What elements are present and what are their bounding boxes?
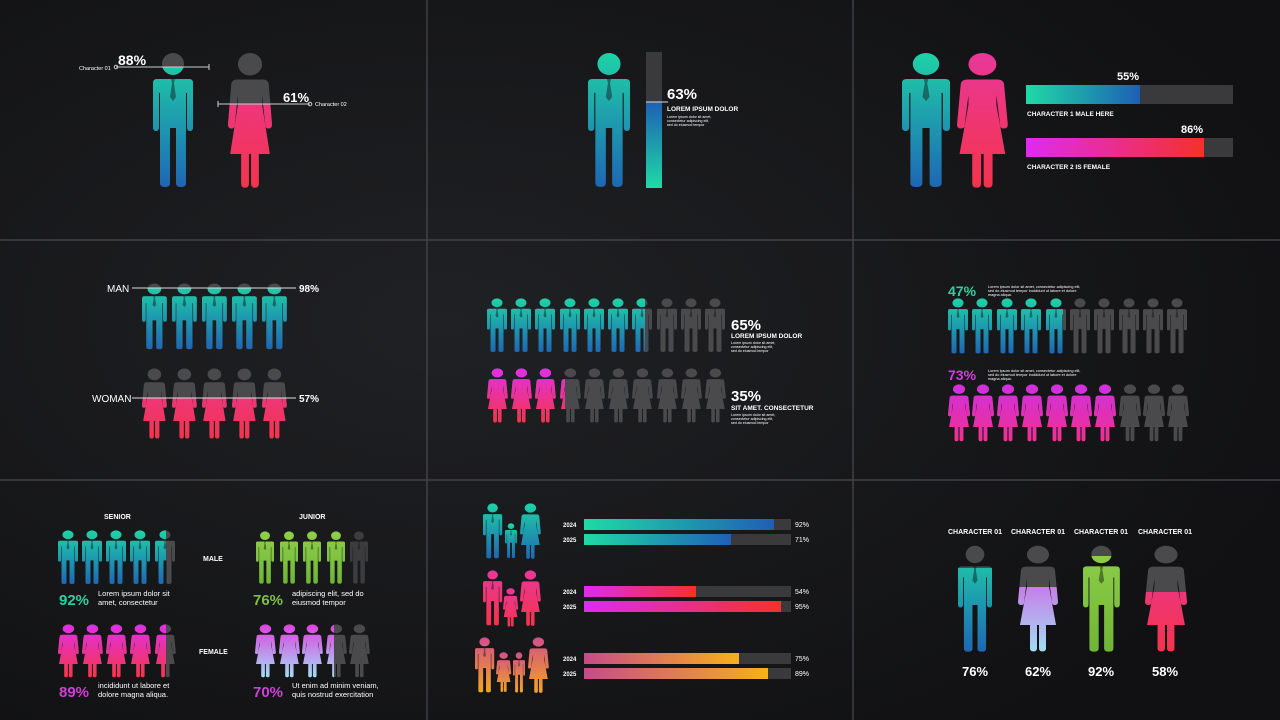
text: 70%: 70% [253, 684, 283, 701]
text: 63% lorem ipsum: Lorem ipsum dolor sit amet, [667, 115, 711, 119]
icon: family 2 [483, 570, 541, 627]
character 3: man 92%: 92% [1088, 664, 1114, 679]
icon: woman 61% [228, 53, 272, 188]
text: 89%: 89% [59, 684, 89, 701]
text: 89%: incididunt ut labore et [98, 681, 170, 690]
row: senior men 92% [58, 530, 175, 584]
panel: man with vertical bar [588, 52, 738, 188]
panel: characters with horizontal bars [902, 53, 1233, 188]
text: 35%: SIT AMET. CONSECTETUR [731, 405, 814, 412]
character 1: man 76% [948, 529, 1002, 679]
row: man 98% [107, 283, 319, 349]
text: 35%: sed do eiusmod tempor [731, 421, 769, 425]
text: 65% [731, 317, 802, 353]
text: 65%: 65% [731, 317, 761, 334]
icon: family 1 [483, 503, 541, 559]
text: 47%: magna aliqua. [988, 293, 1012, 297]
bars: family 3: 75% [795, 656, 809, 663]
row: junior women 70% [255, 624, 370, 677]
character 2: woman 62%: 62% [1025, 664, 1051, 679]
label: character 02 [218, 90, 347, 108]
text: 76% [253, 589, 364, 609]
panel: four characters [948, 529, 1192, 679]
text: 92%: amet, consectetur [98, 598, 158, 607]
row: junior men 76% [256, 531, 368, 584]
row: women 73% [948, 384, 1189, 441]
character 3: man 92% [1074, 529, 1128, 679]
character 4: woman 58%: 58% [1152, 664, 1178, 679]
panel: man and woman rows [92, 283, 319, 438]
row: women 35% [487, 368, 726, 423]
text: 76%: 76% [253, 592, 283, 609]
label: male: MALE [203, 556, 223, 563]
vertical bar 63% [646, 52, 668, 188]
text: 65%: Lorem ipsum dolor sit amet, [731, 341, 775, 345]
panel: two characters with measuring lines [79, 52, 347, 188]
label: character 01: Character 01 [79, 66, 111, 72]
text: 63% lorem ipsum: sed do eiusmod tempor [667, 123, 705, 127]
text: 73%: Lorem ipsum dolor sit amet, consectetur adipiscing elit, [988, 369, 1080, 373]
heading: senior: SENIOR [104, 514, 131, 521]
text: 89%: dolore magna aliqua. [98, 690, 168, 699]
panel: 47% / 73% rows [948, 283, 1189, 441]
icon: man [588, 53, 630, 187]
text: 65%: consectetur adipiscing elit, [731, 345, 773, 349]
bars: family 3: 89% [795, 671, 809, 678]
text: 73% [948, 367, 1080, 383]
text: 65%: LOREM IPSUM DOLOR [731, 333, 802, 340]
bar: character 2 86% [1026, 124, 1233, 171]
panel: senior / junior by gender [58, 514, 379, 701]
label: character 02: Character 02 [315, 102, 347, 108]
text: 70% [253, 681, 379, 701]
bars: family 2: 2025 [563, 605, 577, 611]
text: 47% [948, 283, 1080, 299]
character 3: man 92%: CHARACTER 01 [1074, 529, 1128, 536]
row: woman 57%: WOMAN [92, 394, 131, 405]
text: 47%: 47% [948, 283, 977, 299]
bar: character 1 55%: 55% [1117, 71, 1139, 83]
text: 35% [731, 388, 814, 425]
bars: family 1: 92% [795, 522, 809, 529]
text: 65%: sed do eiusmod tempor [731, 349, 769, 353]
bars: family 3 [563, 653, 809, 679]
text: 70%: quis nostrud exercitation [292, 690, 373, 699]
panel: family bar chart [475, 503, 809, 693]
row: men 65% [487, 298, 725, 352]
text: 73%: magna aliqua. [988, 377, 1012, 381]
row: man 98%: 98% [299, 284, 319, 295]
bars: family 2 [563, 586, 809, 612]
character 4: woman 58% [1138, 529, 1192, 679]
text: 92% [59, 589, 171, 609]
character 1: man 76%: CHARACTER 01 [948, 529, 1002, 536]
bar: character 2 86%: CHARACTER 2 IS FEMALE [1027, 164, 1111, 171]
panel: ten-figure rows 65% / 35% [487, 298, 814, 425]
bars: family 2: 54% [795, 589, 809, 596]
bar: character 1 55% [1026, 71, 1233, 118]
bars: family 1: 2025 [563, 538, 577, 544]
text: 63% lorem ipsum: 63% [667, 86, 697, 103]
bars: family 2: 2024 [563, 590, 577, 596]
text: 35%: Lorem ipsum dolor sit amet, [731, 413, 775, 417]
bar: character 2 86%: 86% [1181, 124, 1203, 136]
text: 73%: sed do eiusmod tempor incididunt ut labore et dolore [988, 373, 1076, 377]
icon: man [902, 53, 950, 187]
label: character 01 [79, 52, 209, 72]
text: 47%: Lorem ipsum dolor sit amet, consectetur adipiscing elit, [988, 285, 1080, 289]
text: 35%: 35% [731, 388, 761, 405]
bars: family 2: 95% [795, 604, 809, 611]
row: woman 57% [92, 369, 319, 438]
text: 63% lorem ipsum [667, 86, 738, 127]
row: woman 57%: 57% [299, 394, 319, 405]
text: 92%: Lorem ipsum dolor sit [98, 589, 171, 598]
row: man 98%: MAN [107, 284, 129, 295]
bar: character 1 55%: CHARACTER 1 MALE HERE [1027, 111, 1114, 118]
text: 89% [59, 681, 170, 701]
text: 35%: consectetur adipiscing elit, [731, 417, 773, 421]
bars: family 3: 2024 [563, 657, 577, 663]
text: 73%: 73% [948, 367, 977, 383]
bars: family 3: 2025 [563, 672, 577, 678]
row: senior women 89% [58, 624, 176, 677]
character 2: woman 62% [1011, 529, 1065, 679]
text: 92%: 92% [59, 592, 89, 609]
text: 63% lorem ipsum: LOREM IPSUM DOLOR [667, 106, 738, 113]
icon: woman [957, 53, 1008, 188]
text: 76%: eiusmod tempor [292, 598, 346, 607]
text: 70%: Ut enim ad minim veniam, [292, 681, 379, 690]
character 4: woman 58%: CHARACTER 01 [1138, 529, 1192, 536]
bars: family 1: 2024 [563, 523, 577, 529]
label: character 01: 88% [118, 52, 147, 68]
label: female: FEMALE [199, 649, 228, 656]
label: character 02: 61% [283, 90, 309, 105]
text: 63% lorem ipsum: consectetur adipiscing elit, [667, 119, 709, 123]
icon: family 3 [475, 637, 549, 693]
character 2: woman 62%: CHARACTER 01 [1011, 529, 1065, 536]
bars: family 1 [563, 519, 809, 545]
icon: man 88% [153, 53, 193, 187]
bars: family 1: 71% [795, 537, 809, 544]
heading: junior: JUNIOR [299, 514, 325, 521]
text: 76%: adipiscing elit, sed do [292, 589, 364, 598]
text: 47%: sed do eiusmod tempor incididunt ut labore et dolore [988, 289, 1076, 293]
character 1: man 76%: 76% [962, 664, 988, 679]
row: men 47% [948, 298, 1187, 353]
